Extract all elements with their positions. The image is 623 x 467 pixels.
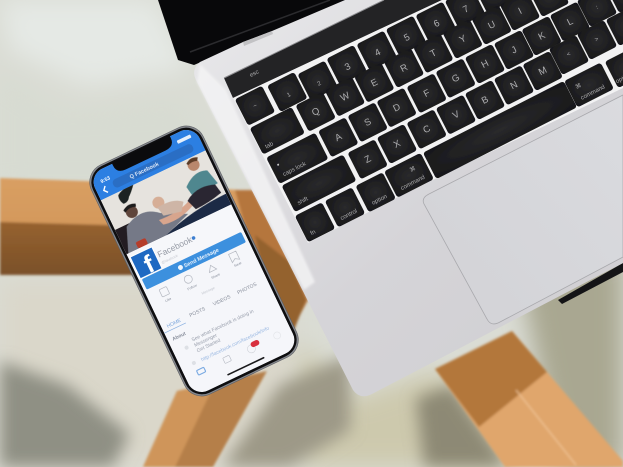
qwerty row: T bbox=[428, 47, 439, 60]
modifier row: option bbox=[371, 194, 388, 207]
bottom letter row: N bbox=[509, 79, 520, 92]
dark gap under the laptop front edge bbox=[558, 263, 623, 304]
modifier row: ⌘ bbox=[574, 82, 583, 91]
esc key label: esc bbox=[249, 69, 260, 79]
home indicator bbox=[227, 357, 265, 376]
page tabs: PHOTOS bbox=[236, 281, 259, 296]
phone screen bbox=[89, 125, 299, 397]
number row: ~ bbox=[253, 103, 259, 110]
bottom letter row: X bbox=[392, 138, 403, 151]
laptop bbox=[158, 0, 623, 396]
number row: 5 bbox=[402, 32, 412, 44]
action icons bbox=[158, 251, 240, 297]
home row: K bbox=[537, 30, 548, 43]
status icons bbox=[177, 134, 192, 144]
action labels: Share bbox=[211, 272, 221, 280]
action labels: Save bbox=[233, 261, 242, 268]
touch bar bbox=[224, 0, 442, 98]
about section: Get Started bbox=[196, 338, 222, 354]
about section bbox=[171, 297, 271, 371]
phone frame bbox=[83, 120, 305, 402]
home row: G bbox=[450, 72, 462, 85]
keyboard well bbox=[233, 0, 623, 243]
page title: Facebook bbox=[156, 234, 194, 259]
table shadows bbox=[0, 355, 508, 467]
bottom letter row: B bbox=[480, 94, 491, 107]
number row bbox=[235, 0, 514, 126]
trackpad bbox=[423, 95, 623, 324]
number row: 7 bbox=[461, 3, 471, 16]
qwerty row: : bbox=[595, 5, 600, 11]
page name in header: Q Facebook bbox=[129, 161, 161, 181]
about section: About bbox=[171, 331, 187, 343]
number row: 4 bbox=[373, 47, 383, 59]
modifier row: fn bbox=[310, 229, 317, 237]
laptop deck bbox=[194, 0, 623, 396]
number row: 2 bbox=[317, 81, 323, 88]
modifier row bbox=[295, 48, 623, 242]
home row: D bbox=[391, 102, 403, 115]
laptop screen and hinge shadow bbox=[158, 0, 350, 65]
page tabs bbox=[161, 281, 259, 334]
number row: 3 bbox=[343, 61, 353, 73]
wooden frame bbox=[0, 178, 623, 467]
modifier row: command bbox=[580, 84, 606, 102]
facebook logo: f bbox=[139, 250, 160, 279]
home row: L bbox=[565, 16, 575, 28]
qwerty row: E bbox=[369, 77, 380, 89]
verified badge bbox=[192, 236, 196, 240]
about section: http://facebook.com/facebook/info bbox=[200, 325, 271, 363]
facebook logo bbox=[130, 246, 162, 279]
bottom letter row: > bbox=[594, 36, 600, 43]
hinge tab bbox=[243, 31, 273, 46]
page tabs: HOME bbox=[166, 317, 183, 330]
phone bezel bbox=[85, 122, 303, 400]
home row bbox=[266, 2, 590, 184]
qwerty row bbox=[250, 0, 623, 155]
qwerty row: R bbox=[399, 62, 410, 75]
notch bbox=[112, 135, 175, 174]
send message button: Send Message bbox=[183, 248, 220, 269]
bottom letter row: < bbox=[566, 51, 572, 58]
send message button bbox=[142, 232, 246, 290]
bottom letter row: V bbox=[451, 109, 462, 121]
photo: family on a couch bbox=[101, 150, 231, 254]
action labels: Message bbox=[201, 286, 216, 296]
keyboard bbox=[235, 0, 623, 242]
home row: caps lock bbox=[282, 161, 308, 178]
action labels bbox=[165, 262, 242, 302]
bottom letter row: shift bbox=[297, 196, 310, 207]
number row: 6 bbox=[432, 18, 442, 30]
status time: 9:53 bbox=[100, 175, 112, 185]
back chevron bbox=[102, 186, 108, 194]
qwerty row: Y bbox=[458, 33, 469, 46]
page tabs: POSTS bbox=[189, 306, 207, 319]
phone bbox=[83, 120, 305, 402]
bottom letter row bbox=[282, 6, 623, 212]
qwerty row: I bbox=[517, 6, 524, 17]
about section: Messenger bbox=[193, 332, 219, 349]
bottom letter row: M bbox=[537, 65, 549, 78]
home row: F bbox=[422, 87, 432, 100]
modifier row: ⌘ bbox=[408, 165, 417, 174]
qwerty row: U bbox=[486, 19, 498, 32]
bottom tab bar bbox=[196, 329, 282, 378]
blue app header bbox=[94, 130, 206, 201]
home row: A bbox=[333, 131, 344, 144]
search bar bbox=[111, 143, 195, 189]
number row: 1 bbox=[286, 92, 293, 99]
bottom letter row: C bbox=[421, 123, 433, 136]
qwerty row: Q bbox=[310, 106, 322, 119]
home row: H bbox=[480, 58, 491, 71]
about section: See what Facebook is doing in bbox=[191, 308, 255, 343]
qwerty row: tab bbox=[264, 141, 275, 150]
page tabs: VIDEOS bbox=[212, 294, 232, 308]
page subtitle: @facebook bbox=[161, 254, 179, 265]
action labels: Follow bbox=[187, 283, 198, 291]
home row: J bbox=[510, 44, 519, 56]
deck bright left edge bbox=[197, 64, 315, 290]
qwerty row: W bbox=[339, 90, 352, 104]
profile card bbox=[127, 204, 244, 281]
action labels: Like bbox=[164, 297, 172, 303]
home row: S bbox=[363, 116, 373, 129]
touch bar rim bbox=[224, 0, 384, 78]
modifier row: control bbox=[340, 209, 358, 222]
bottom letter row: Z bbox=[363, 153, 373, 166]
modifier row: command bbox=[400, 175, 426, 192]
